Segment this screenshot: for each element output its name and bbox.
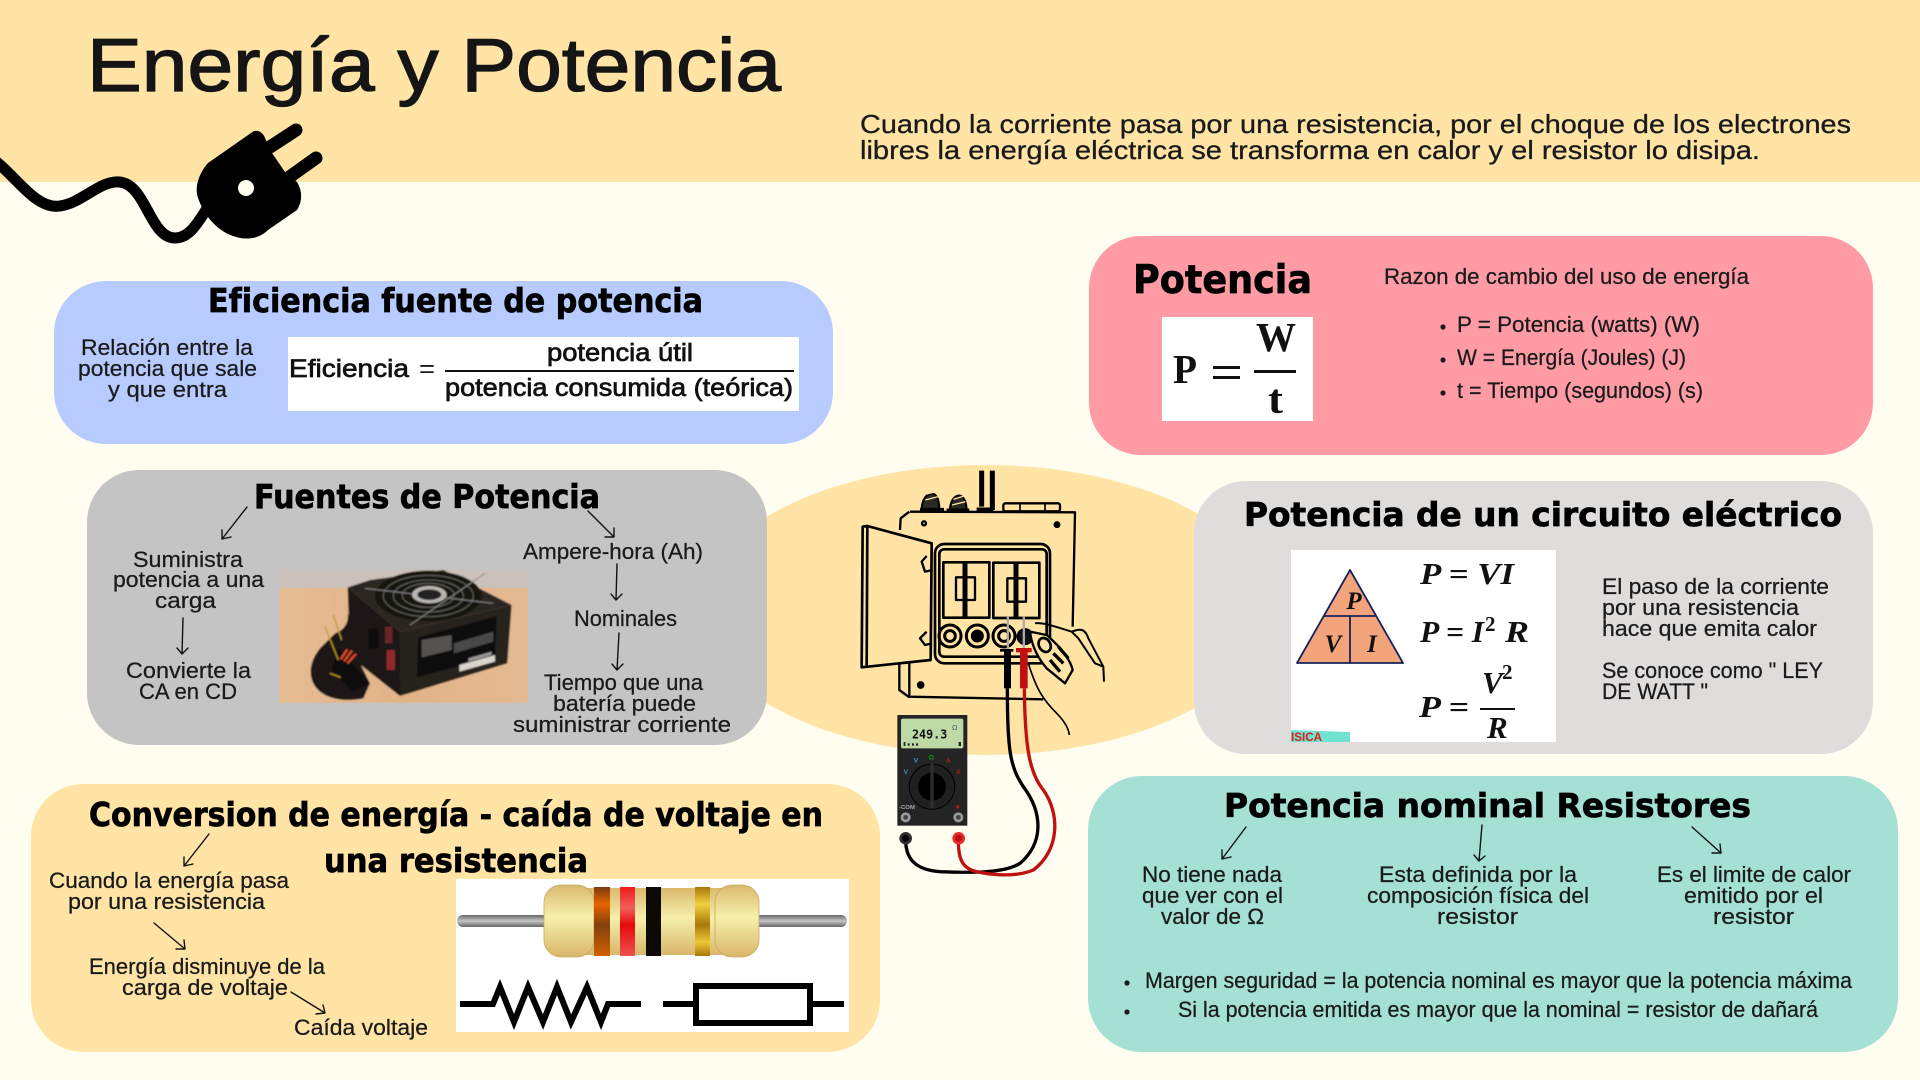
illustration: test probes and leads: [899, 617, 1055, 875]
arrow: down to convierte: [177, 618, 188, 654]
heading: circuito: Potencia de un circuito eléctrico: [1244, 495, 1842, 534]
illustration: multimeter: A: [946, 758, 951, 765]
panel: eficiencia fuente de potencia: [54, 281, 833, 444]
text: no tiene nada: que ver con el: [1142, 883, 1283, 908]
text: suministra: potencia a una: [113, 567, 265, 592]
panel: potencia: [1089, 236, 1873, 455]
equations: P = VI: [1419, 556, 1515, 591]
resistor: [457, 885, 847, 957]
list: margen: Si la potencia emitida es mayor que la nominal = resistor de dañará: [1178, 997, 1819, 1022]
list: variables: t = Tiempo (segundos) (s): [1457, 378, 1703, 403]
illustration: multimeter: V: [914, 758, 919, 765]
heading: conversión: Conversion de energía - caída de voltaje en: [89, 795, 823, 834]
arrow: to límite: [1692, 827, 1721, 853]
text: energía disminuye: Energía disminuye de la: [89, 954, 326, 979]
text: definida: Esta definida por la: [1379, 862, 1578, 887]
text: caída voltaje: Caída voltaje: [294, 1015, 428, 1040]
text: convierte: CA en CD: [139, 679, 237, 704]
formula: eficiencia: =: [419, 355, 435, 383]
list: margen: Margen seguridad = la potencia nominal es mayor que la potencia máxima: [1145, 968, 1853, 993]
text: paso de la corriente: [1602, 574, 1829, 641]
title: Energía y Potencia: [87, 23, 781, 107]
arrow: to no tiene nada: [1222, 827, 1246, 859]
text: relación: Relación entre la: [81, 335, 254, 360]
formula card: triangle and equations: [1291, 550, 1556, 745]
panel: fuentes de potencia: [87, 470, 767, 745]
heading: fuentes: Fuentes de Potencia: [254, 477, 600, 516]
strip: ISICA: [1291, 730, 1350, 744]
arrow: to tiempo: [612, 633, 623, 670]
intro paragraph: libres la energía eléctrica se transforma en calor y el resistor lo disipa.: [860, 135, 1760, 165]
image: resistor and symbols: [456, 879, 849, 1032]
formula: eficiencia: Eficiencia: [289, 355, 409, 383]
icon: plug with cable: [0, 130, 316, 238]
symbol: rectangular resistor: [663, 986, 844, 1023]
diagram: P V I triangle: V: [1325, 631, 1344, 658]
formula: P = W / t: W: [1256, 314, 1296, 360]
text: paso de la corriente: El paso de la corriente: [1602, 574, 1829, 599]
list: variables: W = Energía (Joules) (J): [1457, 345, 1686, 370]
formula: P = W / t: [1162, 314, 1313, 422]
diagram: P V I triangle: P: [1345, 588, 1362, 615]
text: definición: Razon de cambio del uso de energía: [1384, 264, 1750, 289]
arrow: to caída: [291, 992, 325, 1014]
illustration: multimeter: Ω: [952, 723, 958, 732]
text: límite: Es el limite de calor: [1657, 862, 1851, 887]
arrow: to suministra: [222, 507, 247, 539]
text: relación: [78, 335, 257, 402]
text: energía disminuye: [89, 954, 326, 1000]
strip: ISICA: ISICA: [1291, 730, 1322, 744]
header band: [0, 0, 1920, 182]
arrow: to nominales: [611, 564, 622, 600]
equations: P =: [1418, 689, 1469, 724]
equations: R: [1486, 710, 1508, 745]
equations: R: [1504, 614, 1529, 649]
panel: potencia nominal resistores: [1088, 776, 1898, 1052]
text: convierte: [126, 658, 252, 704]
equations: 2: [1485, 612, 1496, 636]
text: definida: resistor: [1437, 904, 1518, 929]
text: nominales: Nominales: [574, 606, 677, 631]
text: no tiene nada: No tiene nada: [1142, 862, 1283, 887]
text: suministra: Suministra: [133, 547, 244, 572]
intro paragraph: Cuando la corriente pasa por una resistencia, por el choque de los electrones: [860, 109, 1851, 139]
text: límite: [1657, 862, 1851, 929]
text: cuando: [49, 868, 290, 914]
illustration: multimeter: A: [956, 769, 961, 776]
illustration: multimeter: [897, 715, 967, 826]
illustration: fuse box with hand: [862, 471, 1104, 735]
arrow: to ampere-hora: [588, 511, 614, 537]
arrow: to cuando: [184, 834, 209, 866]
text: convierte: Convierte la: [126, 658, 252, 683]
text: relación: potencia que sale: [78, 356, 257, 381]
list: variables: [1440, 312, 1703, 403]
text: suministra: carga: [155, 588, 217, 613]
list: variables: P = Potencia (watts) (W): [1457, 312, 1700, 337]
illustration: multimeter: 249.3: [912, 726, 947, 741]
symbol: zigzag resistor: [460, 987, 641, 1022]
illustration: multimeter: Ω: [929, 754, 935, 761]
formula: P = W / t: P: [1173, 346, 1197, 392]
heading: eficiencia: Eficiencia fuente de potencia: [208, 281, 703, 320]
central yellow ellipse: [700, 465, 1270, 755]
text: definida: composición física del: [1367, 883, 1589, 908]
text: cuando: por una resistencia: [68, 889, 266, 914]
illustration: multimeter: +: [955, 803, 960, 812]
text: tiempo: suministrar corriente: [513, 712, 731, 737]
text: límite: emitido por el: [1684, 883, 1823, 908]
text: relación: y que entra: [108, 377, 228, 402]
text: ley de watt: [1602, 658, 1823, 704]
text: ley de watt: Se conoce como " LEY: [1602, 658, 1823, 683]
intro paragraph: [860, 109, 1851, 165]
illustration: multimeter: V: [904, 769, 909, 776]
text: energía disminuye: carga de voltaje: [122, 975, 288, 1000]
panel: conversión de energía: [31, 784, 880, 1052]
text: tiempo: [513, 670, 731, 737]
heading: nominal: Potencia nominal Resistores: [1224, 786, 1751, 825]
diagram: P V I triangle: I: [1366, 631, 1378, 658]
text: paso de la corriente: hace que emita calor: [1602, 616, 1817, 641]
text: definida: [1367, 862, 1589, 929]
list: margen: [1124, 968, 1853, 1022]
text: paso de la corriente: por una resistencia: [1602, 595, 1800, 620]
text: ley de watt: DE WATT ": [1602, 679, 1708, 704]
text: ampere-hora: Ampere-hora (Ah): [523, 539, 703, 564]
heading: conversión: [89, 795, 823, 880]
panel: potencia de un circuito eléctrico: [1194, 481, 1873, 754]
arrow: to energía disminuye: [154, 923, 185, 949]
text: suministra: [113, 547, 265, 613]
text: tiempo: batería puede: [553, 691, 696, 716]
text: no tiene nada: valor de Ω: [1161, 904, 1264, 929]
text: tiempo: Tiempo que una: [544, 670, 704, 695]
illustration: multimeter: -COM: [899, 805, 915, 811]
equations: [1418, 556, 1529, 745]
heading: potencia: Potencia: [1133, 258, 1312, 303]
equations: 2: [1502, 660, 1512, 684]
formula: eficiencia: potencia consumida (teórica): [445, 374, 793, 402]
equations: P = I: [1419, 614, 1485, 649]
text: no tiene nada: [1142, 862, 1283, 929]
equations: V: [1482, 665, 1505, 700]
arrow: to definida: [1474, 825, 1485, 861]
text: cuando: Cuando la energía pasa: [49, 868, 290, 893]
photo: power supply: [279, 569, 528, 703]
heading: conversión: una resistencia: [324, 841, 588, 880]
formula: eficiencia: potencia útil: [547, 339, 693, 367]
text: límite: resistor: [1713, 904, 1794, 929]
diagram: P V I triangle: [1297, 570, 1403, 663]
formula: eficiencia: [288, 337, 799, 411]
formula: P = W / t: t: [1268, 376, 1283, 422]
